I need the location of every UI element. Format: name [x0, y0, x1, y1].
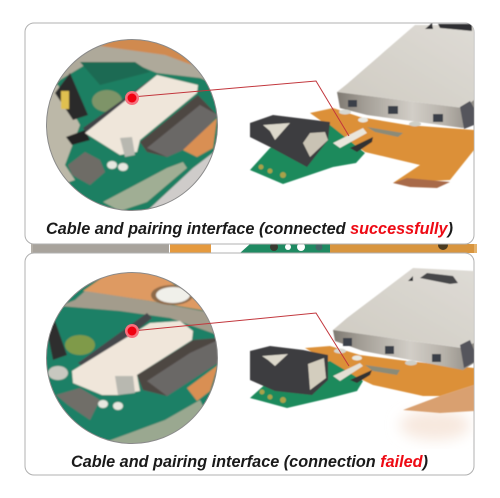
product photo: headphone jack board and card module — [250, 268, 474, 440]
red marker dot — [125, 91, 139, 105]
strip: product photo visible between panels — [31, 240, 477, 253]
callout line — [132, 313, 349, 366]
red marker dot — [125, 324, 139, 338]
panel: connected successfully — [25, 23, 474, 244]
callout line — [132, 81, 349, 136]
caption: Cable and pairing interface (connection failed) — [71, 453, 428, 471]
product photo: headphone jack board and card module — [250, 23, 474, 188]
inset circle: connector close-up — [46, 37, 218, 211]
caption: Cable and pairing interface (connected successfully) — [46, 220, 453, 238]
panel: connection failed — [25, 253, 474, 475]
inset circle: connector close-up — [46, 272, 218, 444]
